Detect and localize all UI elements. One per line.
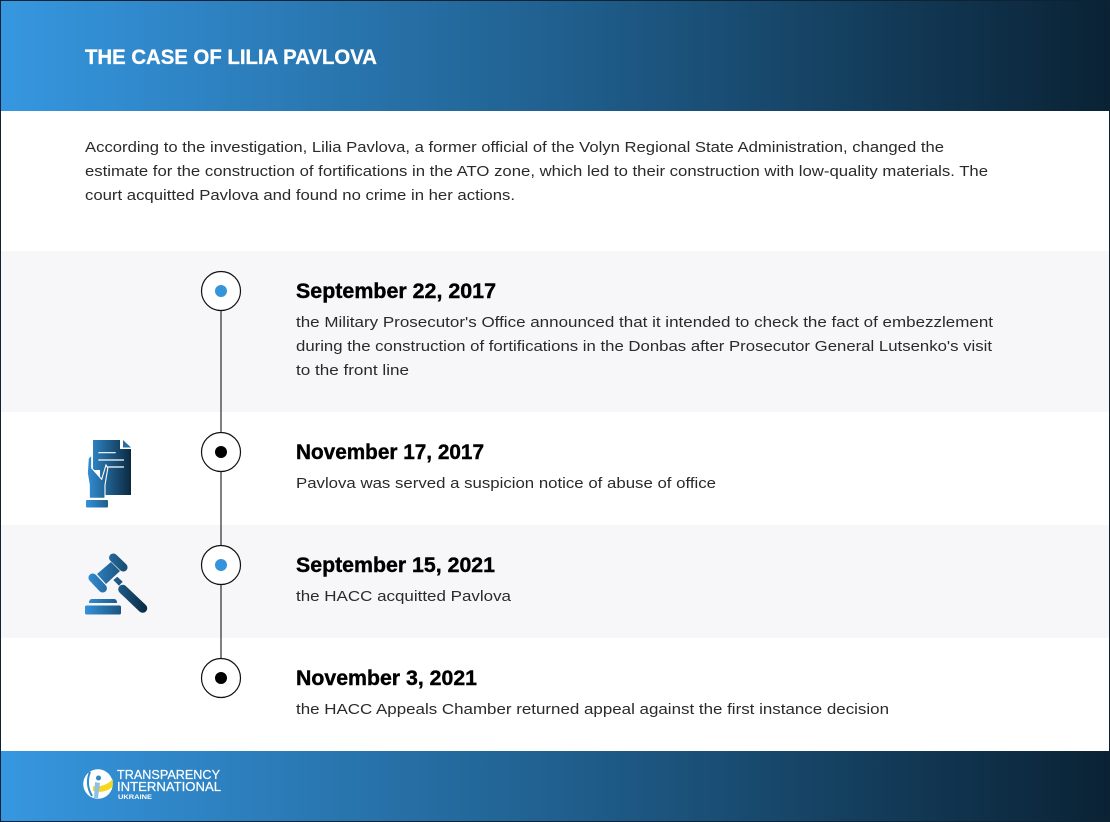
icon: gavel	[85, 558, 143, 614]
intro text: court acquitted Pavlova and found no crime in her actions.	[85, 187, 515, 204]
event: September 15, 2021: the HACC acquitted Pavlova	[296, 588, 512, 605]
event: September 22, 2017: to the front line	[296, 362, 409, 379]
logo: Transparency International Ukraine: INTERNATIONAL	[117, 780, 221, 794]
event: September 15, 2021: September 15, 2021	[296, 554, 495, 577]
event: November 17, 2017: November 17, 2017	[296, 441, 484, 464]
logo emblem	[83, 769, 113, 799]
event: September 22, 2017: the Military Prosecutor's Office announced that it intended to check the fact of embezzlement	[296, 314, 994, 331]
timeline marker: November 3, 2021	[202, 658, 240, 698]
timeline marker: September 22, 2017	[202, 272, 240, 310]
event: September 15, 2021	[296, 554, 512, 605]
event: November 17, 2017: Pavlova was served a suspicion notice of abuse of office	[296, 475, 716, 492]
title: THE CASE OF LILIA PAVLOVA	[85, 46, 377, 69]
footer	[0, 751, 1110, 822]
logo: Transparency International Ukraine: TRANSPARENCY	[117, 768, 221, 782]
header	[0, 0, 1110, 111]
intro text	[85, 139, 988, 204]
intro text: According to the investigation, Lilia Pavlova, a former official of the Volyn Regional State Administration, changed the	[85, 139, 944, 156]
logo: Transparency International Ukraine	[83, 768, 221, 801]
timeline marker: November 17, 2017	[202, 432, 240, 472]
event: September 22, 2017: during the construction of fortifications in the Donbas after Prosecutor General Lutsenko's visit	[296, 338, 993, 355]
event: September 22, 2017	[296, 280, 994, 379]
event: November 3, 2021: the HACC Appeals Chamber returned appeal against the first instance decision	[296, 701, 889, 718]
event: November 17, 2017	[296, 441, 716, 492]
event: November 3, 2021	[296, 667, 889, 718]
band: September 22, 2017	[0, 251, 1110, 412]
band: September 15, 2021	[0, 525, 1110, 638]
event: September 22, 2017: September 22, 2017	[296, 280, 496, 303]
timeline marker: September 15, 2021	[202, 546, 240, 584]
logo: Transparency International Ukraine: UKRAINE	[118, 794, 153, 801]
icon: hand holding document	[86, 440, 131, 508]
intro text: estimate for the construction of fortifications in the ATO zone, which led to their construction with low-quality materials. The	[85, 163, 988, 180]
timeline line	[220, 291, 222, 678]
event: November 3, 2021: November 3, 2021	[296, 667, 477, 690]
